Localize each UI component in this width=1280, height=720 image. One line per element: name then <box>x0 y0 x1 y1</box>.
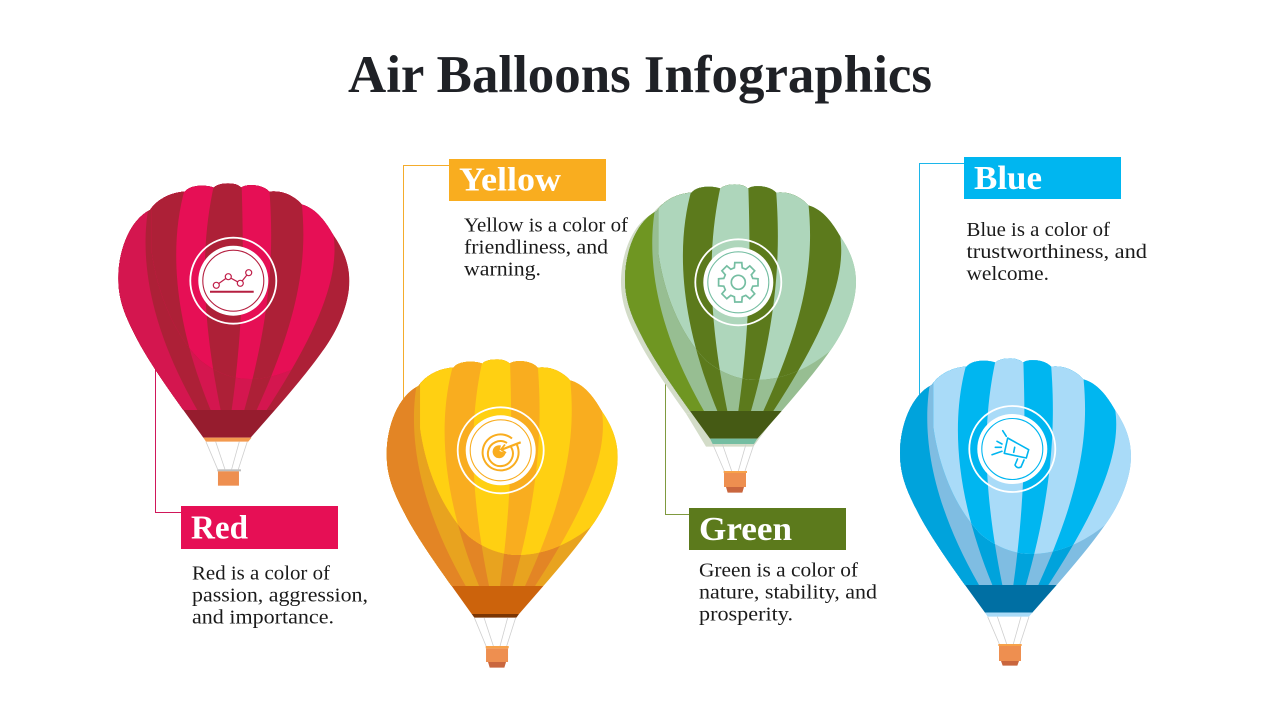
red description <box>192 562 368 628</box>
green description: Green is a color of <box>699 560 858 582</box>
icon: line chart <box>190 238 276 324</box>
blue heading: Blue <box>974 160 1042 197</box>
red heading bar <box>181 506 338 549</box>
red description: and importance. <box>192 606 334 628</box>
icon: gear <box>695 239 781 325</box>
green envelope <box>621 184 856 493</box>
yellow heading bar <box>449 159 606 201</box>
connector: blue <box>920 164 964 400</box>
panel: green balloon <box>621 184 856 493</box>
panel: blue label <box>964 157 1147 285</box>
red heading: Red <box>191 510 248 547</box>
red description: passion, aggression, <box>192 584 368 606</box>
panel: green label <box>689 508 877 626</box>
icon: megaphone <box>969 406 1055 492</box>
red envelope <box>103 175 360 486</box>
yellow description: friendliness, and <box>464 237 608 259</box>
panel: blue balloon <box>900 358 1131 666</box>
yellow description: Yellow is a color of <box>464 215 628 237</box>
green heading bar <box>689 508 846 550</box>
red description: Red is a color of <box>192 562 330 584</box>
panel: yellow balloon <box>372 351 628 668</box>
icon: target <box>458 407 544 493</box>
yellow envelope <box>372 351 628 668</box>
green description: nature, stability, and <box>699 582 877 604</box>
panel: red label <box>181 506 368 628</box>
connector: red <box>156 360 182 512</box>
panel: yellow label <box>449 159 628 281</box>
yellow description <box>464 215 628 281</box>
yellow heading: Yellow <box>459 162 561 199</box>
yellow description: warning. <box>464 259 541 281</box>
blue envelope <box>900 358 1131 666</box>
blue description: Blue is a color of <box>966 219 1110 241</box>
connector: yellow <box>404 166 449 405</box>
green description <box>699 560 877 626</box>
panel: red balloon <box>103 175 360 486</box>
blue heading bar <box>964 157 1121 199</box>
blue description: trustworthiness, and <box>966 241 1147 263</box>
connector: green <box>666 375 690 514</box>
green description: prosperity. <box>699 604 793 626</box>
blue description: welcome. <box>966 263 1049 285</box>
title: Air Balloons Infographics <box>348 46 932 104</box>
green heading: Green <box>699 511 792 548</box>
blue description <box>966 219 1147 285</box>
